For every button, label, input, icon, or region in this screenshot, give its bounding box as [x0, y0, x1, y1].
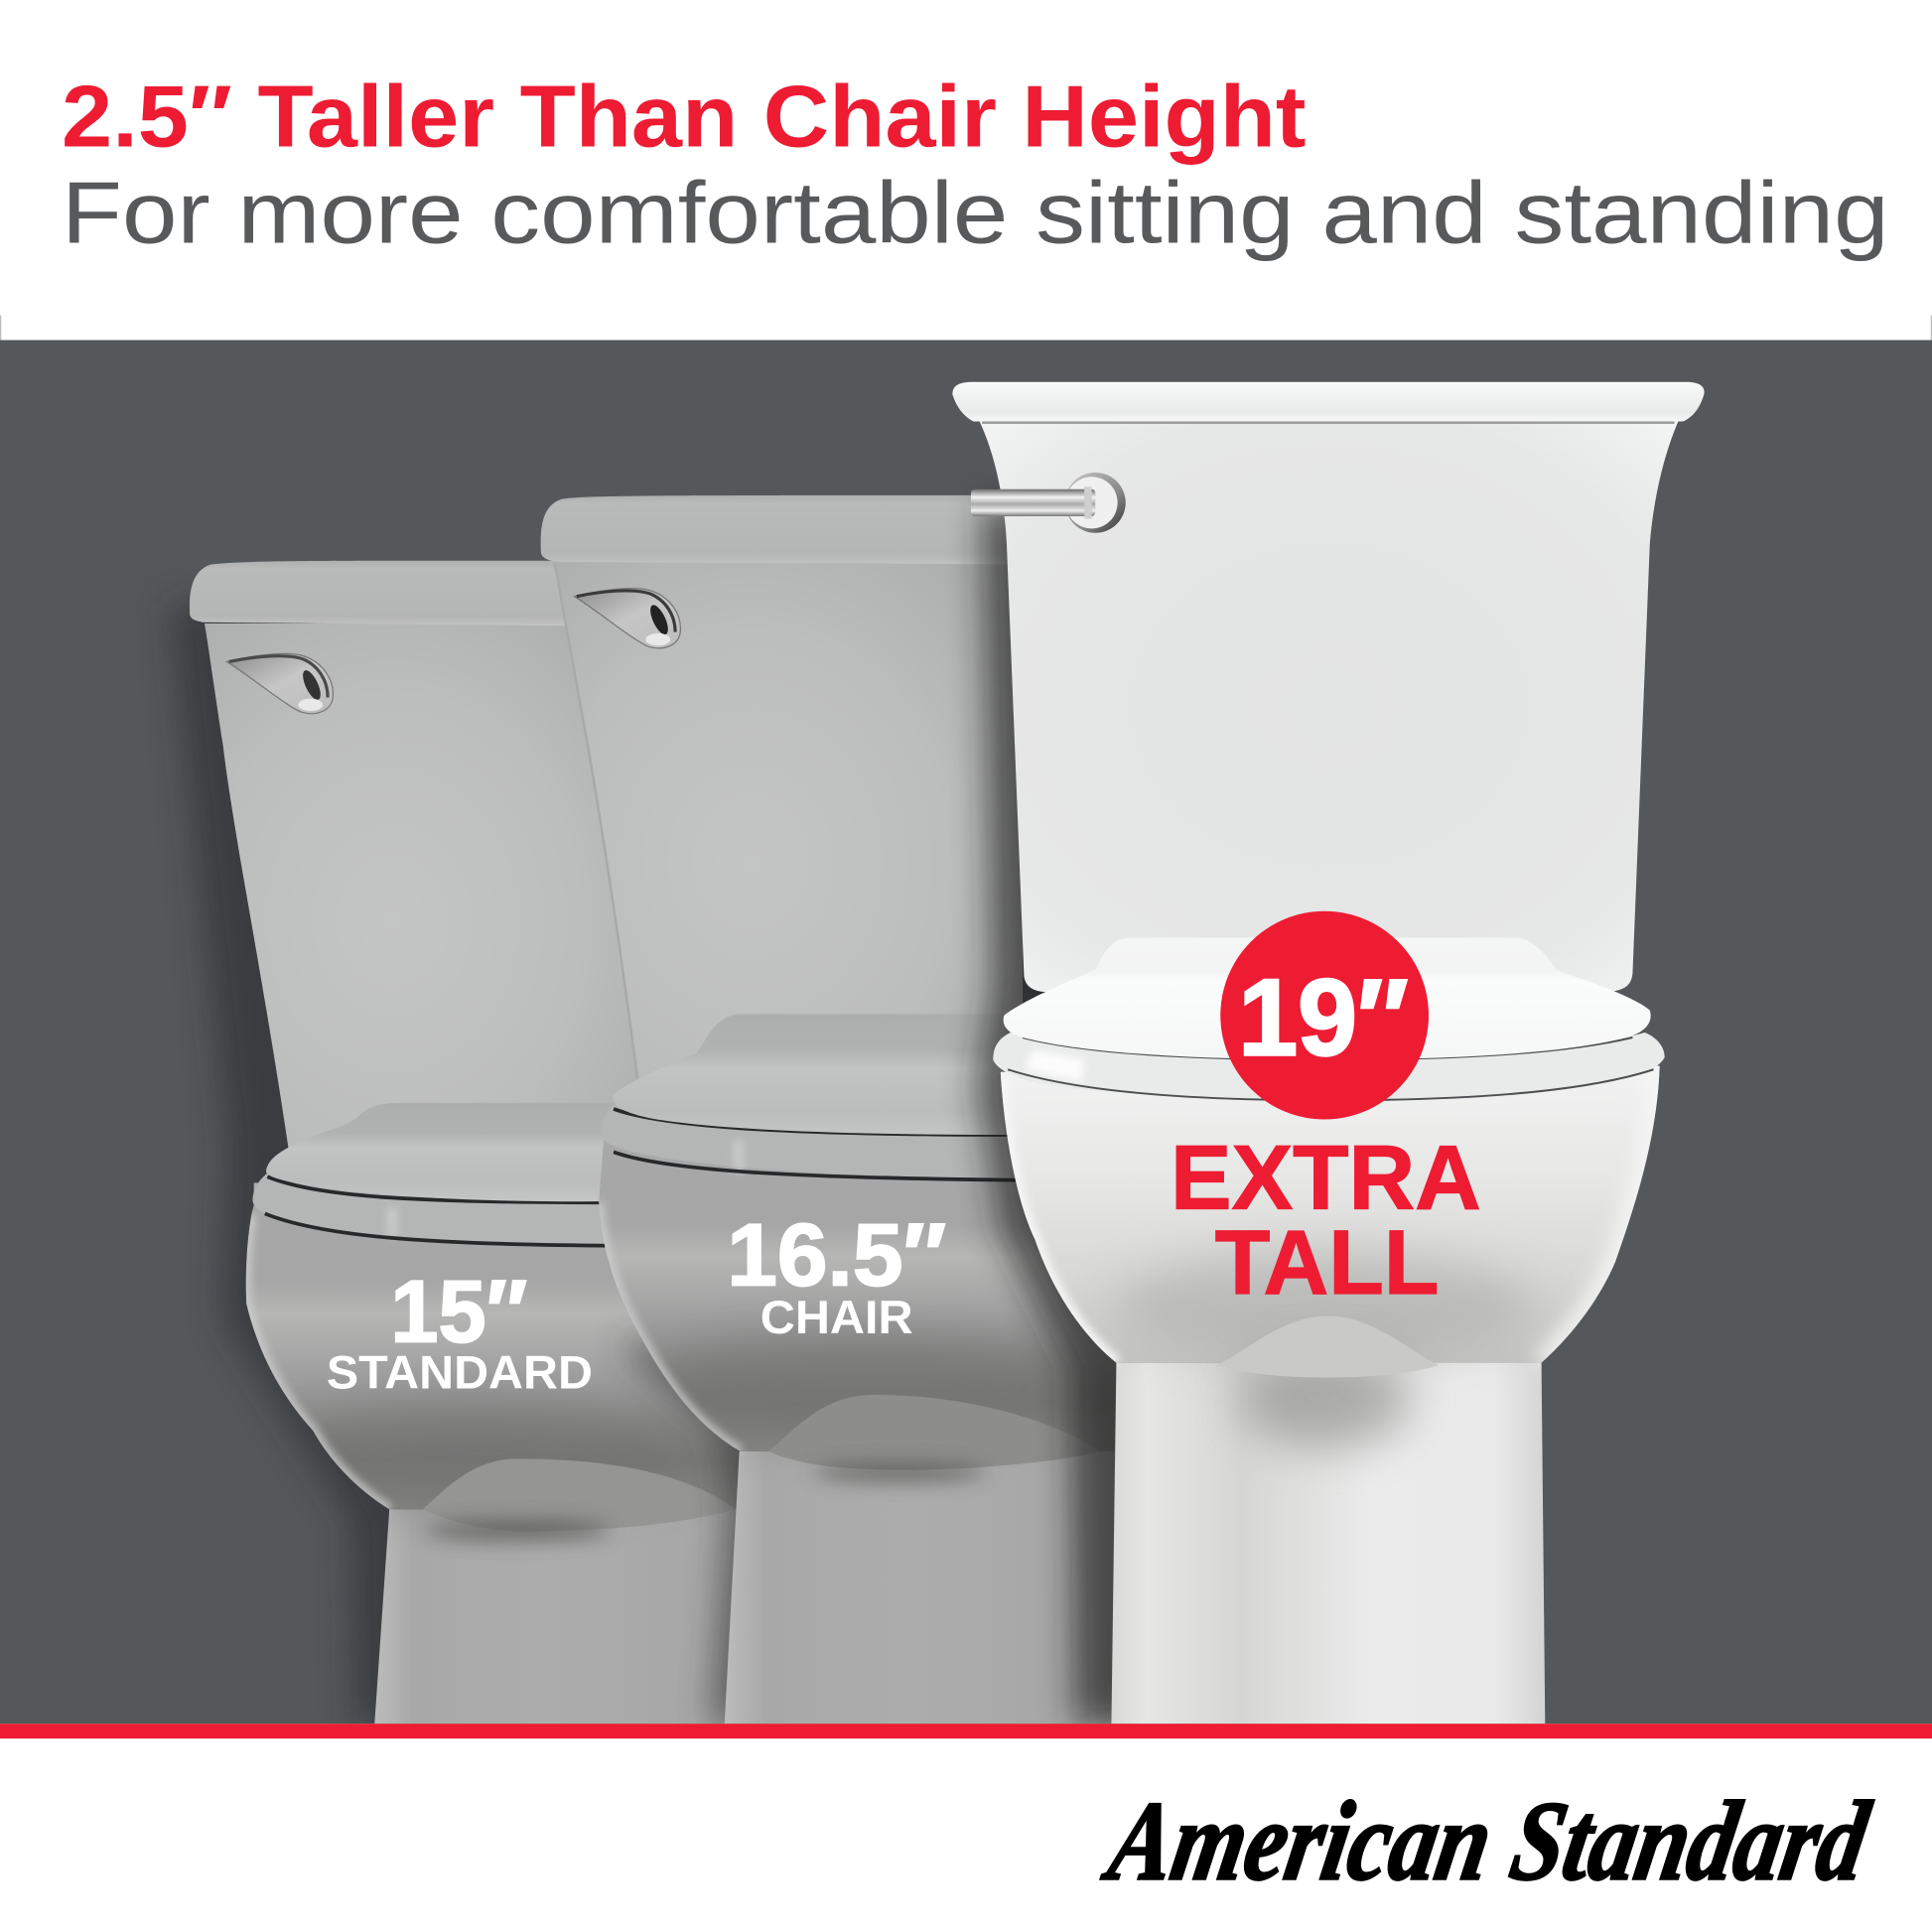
seat lid — [1004, 937, 1651, 1059]
tank — [554, 562, 1023, 1109]
label: 15 inch standard: STANDARD — [327, 1346, 593, 1399]
title: 2.5″ Taller Than Chair Height — [62, 68, 1307, 166]
label: 16.5 inch chair: 16.5″ — [727, 1204, 946, 1304]
seat lid — [266, 1103, 617, 1201]
lid shadow line — [982, 421, 1675, 424]
toilet: 15 inch standard — [170, 561, 788, 1724]
tank — [980, 421, 1678, 992]
label: extra tall: EXTRA — [1171, 1127, 1481, 1228]
panel: dark grey backdrop — [0, 316, 1932, 1724]
tank lid — [952, 382, 1705, 421]
ring reflection — [735, 1140, 743, 1172]
toilet: 19 inch extra tall — [952, 382, 1705, 1724]
red baseline bar — [0, 1724, 1932, 1738]
tank lid — [541, 495, 1023, 564]
cast shadow on wall — [163, 594, 389, 1724]
label: 15 inch standard — [327, 1262, 593, 1399]
tank — [205, 623, 653, 1165]
bowl — [246, 1182, 752, 1509]
bowl and pedestal shading — [599, 1201, 1109, 1481]
pedestal — [725, 1451, 1128, 1724]
label: 15 inch standard: 15″ — [390, 1262, 527, 1361]
cast shadow on middle toilet — [953, 496, 1128, 1724]
tank left edge — [554, 562, 638, 1084]
badge: 19 inch — [1220, 911, 1429, 1120]
tank lid — [190, 561, 579, 625]
flush handle — [574, 589, 680, 648]
seat gap lines — [614, 1109, 1035, 1180]
seat gap lines — [265, 1176, 617, 1246]
seat ring — [252, 1173, 617, 1247]
ring reflection — [1026, 1049, 1084, 1082]
ring reflection — [388, 1207, 397, 1237]
bowl and pedestal shading — [246, 1215, 788, 1724]
seat lid — [613, 1014, 1023, 1135]
bowl — [1001, 1066, 1660, 1363]
label: extra tall — [1171, 1127, 1481, 1313]
seat ring — [602, 1105, 1023, 1177]
bowl and pedestal shading — [1001, 1066, 1660, 1448]
bowl — [599, 1128, 1128, 1451]
pedestal — [1111, 1363, 1545, 1724]
label: extra tall: TALL — [1215, 1212, 1440, 1313]
badge: 19 inch: 19″ — [1238, 957, 1409, 1078]
flush handle — [226, 653, 333, 714]
subtitle: For more comfortable sitting and standing — [62, 163, 1889, 261]
label: 16.5 inch chair: CHAIR — [760, 1291, 913, 1343]
seat ring — [993, 1033, 1665, 1100]
flush handle — [971, 473, 1126, 533]
seat gap lines — [1008, 1037, 1654, 1100]
toilet: 16.5 inch chair — [541, 495, 1128, 1724]
pedestal — [374, 1509, 752, 1724]
